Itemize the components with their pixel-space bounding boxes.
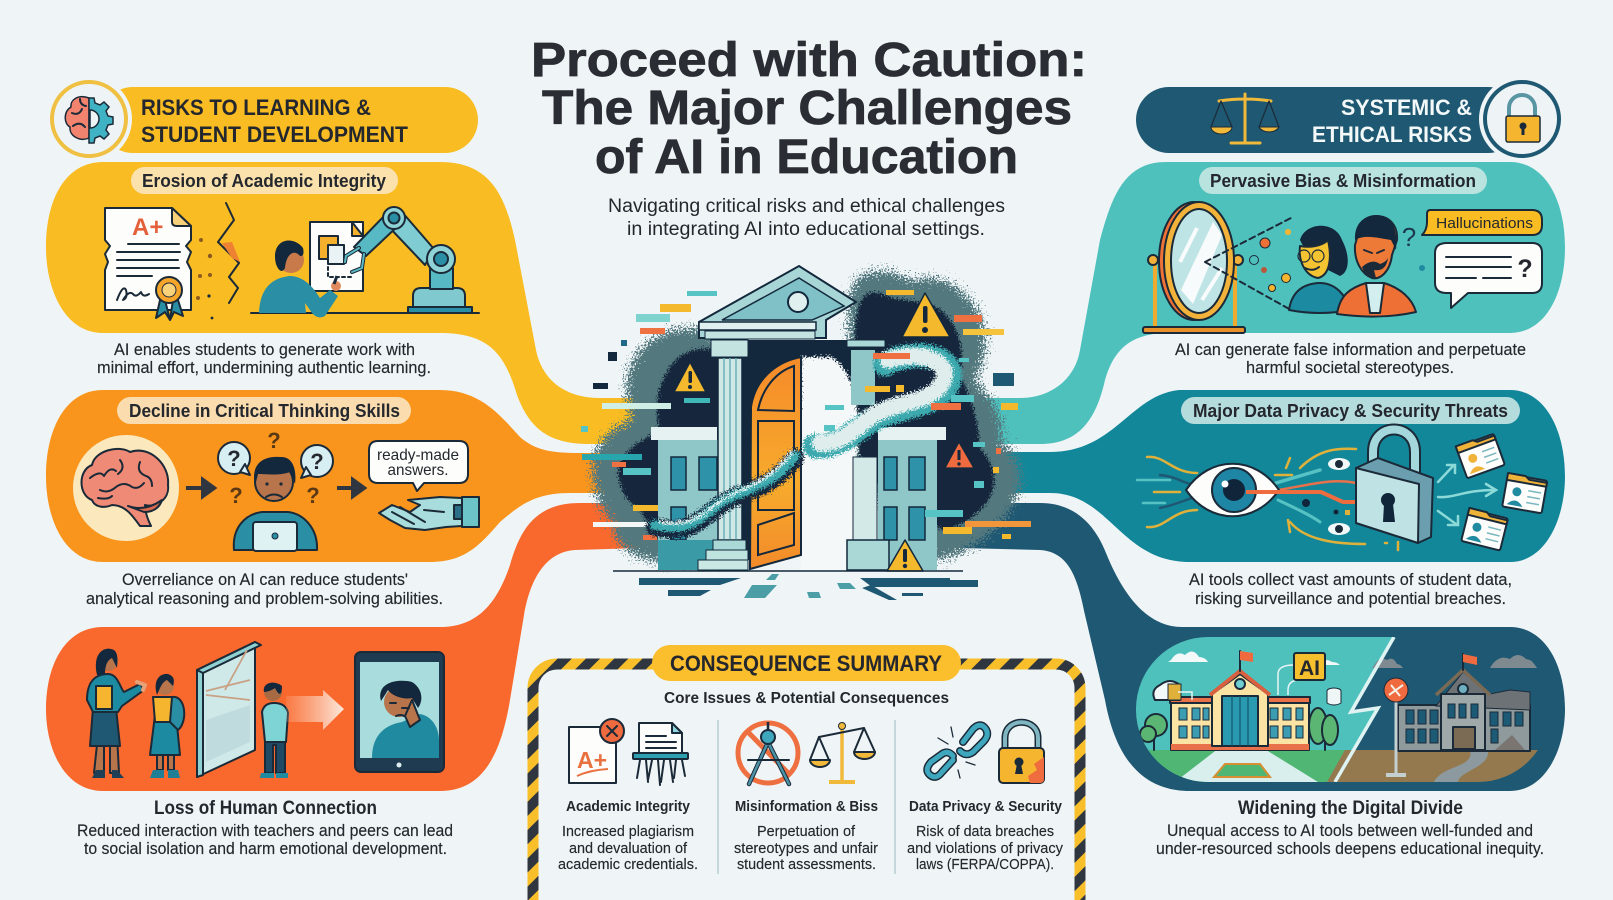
- well-funded side: AI: [1299, 657, 1320, 680]
- arrow: fading: [286, 690, 344, 730]
- panel: decline in critical thinking skills: [46, 390, 640, 608]
- warning triangle: [902, 293, 950, 337]
- open orange door: [750, 357, 801, 569]
- caution tape border: [533, 664, 1080, 900]
- heading and description: Unequal access to AI tools between well-funded and: [1167, 822, 1533, 840]
- warning triangle: [674, 362, 706, 392]
- panel: pervasive bias and misinformation: [960, 162, 1565, 444]
- icon: confused student with laptop: ?: [229, 483, 243, 508]
- icon: confused student with laptop: ?: [310, 449, 324, 474]
- scene: divided schools: [1136, 637, 1550, 782]
- icon: torn diploma: [105, 208, 191, 320]
- summary badge: CONSEQUENCE SUMMARY: [670, 651, 942, 676]
- column: misinformation and bias: stereotypes and unfair: [734, 840, 878, 857]
- icon: brain: [73, 435, 179, 541]
- header: systemic and ethical risks: [1136, 76, 1565, 162]
- speech bubble with question: [1435, 243, 1542, 308]
- description: [1189, 571, 1512, 608]
- heading and description: under-resourced schools deepens educational inequity.: [1156, 840, 1544, 858]
- heading and description: to social isolation and harm emotional development.: [84, 840, 447, 858]
- icon: mirror: [1143, 202, 1245, 333]
- subtitle: Navigating critical risks and ethical challenges: [608, 196, 1005, 217]
- summary badge: [652, 645, 961, 681]
- icon: robot hand: [379, 497, 479, 530]
- icon: lock: [1506, 95, 1540, 142]
- data streams: [1137, 449, 1398, 550]
- title: [531, 34, 1087, 184]
- description: [86, 571, 443, 608]
- column: academic integrity: and devaluation of: [569, 840, 688, 857]
- subtitle: in integrating AI into educational settings.: [627, 219, 985, 240]
- icon: scales: [810, 722, 875, 782]
- icon: student girl: [150, 674, 184, 778]
- speech bubble with question: ?: [1517, 255, 1533, 283]
- callout: hallucinations: [1422, 210, 1542, 235]
- glitch bars right: [824, 290, 1031, 539]
- description: AI can generate false information and perpetuate: [1175, 341, 1526, 359]
- ground and rubble: [613, 571, 978, 600]
- heading and description: Reduced interaction with teachers and peers can lead: [77, 822, 453, 840]
- under-resourced side: [1327, 654, 1550, 782]
- icon: damaged lock: [999, 722, 1044, 783]
- column: misinformation and bias: Perpetuation of: [757, 823, 856, 840]
- icon: broken chain: [927, 725, 987, 778]
- description: minimal effort, undermining authentic learning.: [97, 359, 431, 377]
- speech bubble: ready-made answers: answers.: [388, 462, 448, 479]
- column: data privacy and security: Data Privacy & Security: [909, 799, 1062, 815]
- white gap: [801, 357, 858, 572]
- icon: torn diploma: A+: [132, 214, 163, 241]
- swirling data stream: [655, 356, 950, 529]
- heading and description: [77, 798, 453, 858]
- icon: confused student with laptop: ?: [306, 483, 320, 508]
- heading and description: [1156, 798, 1544, 858]
- header: risks to learning and student development: STUDENT DEVELOPMENT: [141, 122, 409, 147]
- icon: two stereotyped faces: ?: [1402, 222, 1416, 252]
- column: academic integrity: academic credentials.: [558, 856, 698, 873]
- column: misinformation and bias: Misinformation & Biss: [735, 799, 878, 815]
- dark cloud core: [618, 293, 994, 550]
- pill heading: Pervasive Bias & Misinformation: [1210, 171, 1476, 191]
- column: misinformation and bias: [734, 722, 878, 873]
- column: data privacy and security: Risk of data breaches: [916, 823, 1054, 840]
- summary subtitle: Core Issues & Potential Consequences: [664, 690, 949, 707]
- icon: personal data folders: [1438, 433, 1547, 551]
- panel: widening the digital divide: [960, 503, 1565, 858]
- title: Proceed with Caution:: [531, 34, 1087, 87]
- icon: tablet with isolated student: [355, 652, 444, 772]
- grainy cloud halo: [593, 271, 1020, 565]
- lightning divider: [1335, 637, 1394, 782]
- left column and steps: [698, 340, 748, 570]
- subtitle: [608, 196, 1005, 240]
- well-funded side: [1136, 637, 1394, 782]
- column: data privacy and security: and violations of privacy: [907, 840, 1063, 857]
- icon: brain and gear: [65, 97, 113, 143]
- icon: shredder: [633, 723, 688, 785]
- icon: confused student with laptop: ?: [267, 428, 281, 453]
- title: The Major Challenges: [542, 82, 1072, 135]
- title: of AI in Education: [595, 131, 1018, 184]
- icon: failed A+ paper: [569, 719, 624, 783]
- icon: scales: [1211, 94, 1279, 143]
- column: academic integrity: Academic Integrity: [566, 799, 690, 815]
- pill heading: Decline in Critical Thinking Skills: [129, 401, 400, 421]
- panel: major data privacy and security threats: [960, 390, 1565, 608]
- icon: confused student with laptop: [218, 428, 333, 551]
- panel: loss of human connection: [46, 503, 640, 858]
- speech bubble: ready-made answers: ready-made: [377, 447, 459, 464]
- icon: surveillance eye: [1186, 458, 1372, 535]
- pediment roof: [699, 266, 856, 339]
- header: systemic and ethical risks: SYSTEMIC &: [1341, 95, 1472, 120]
- icon: padlock: [1356, 430, 1433, 543]
- header: risks to learning and student development: [46, 76, 478, 162]
- column: data privacy and security: laws (FERPA/COPPA).: [916, 856, 1054, 873]
- column: academic integrity: [558, 719, 698, 873]
- icon: confused student with laptop: ?: [227, 446, 241, 471]
- description: AI tools collect vast amounts of student data,: [1189, 571, 1512, 589]
- crack with debris: [196, 203, 240, 319]
- column: misinformation and bias: student assessments.: [737, 856, 876, 873]
- icon: crossed-out compass: [738, 722, 798, 784]
- header: systemic and ethical risks: ETHICAL RISKS: [1312, 122, 1472, 147]
- warning triangle: [945, 442, 974, 468]
- description: [1175, 341, 1526, 377]
- icon: student using robot arm: [251, 207, 479, 317]
- dashed projection with dots: [1205, 218, 1425, 310]
- pill heading: Erosion of Academic Integrity: [142, 171, 386, 191]
- warning triangle: [887, 540, 923, 571]
- right wing: [847, 340, 946, 570]
- description: risking surveillance and potential breaches.: [1195, 590, 1506, 608]
- icon: two stereotyped faces: [1289, 215, 1416, 317]
- icon: lone boy: [260, 683, 288, 778]
- description: [97, 341, 431, 377]
- heading and description: Widening the Digital Divide: [1238, 798, 1463, 819]
- icon: teacher: [87, 649, 145, 778]
- glitch bars left: [581, 291, 717, 540]
- header: risks to learning and student development: RISKS TO LEARNING &: [141, 95, 371, 120]
- panel: consequence summary: [533, 645, 1080, 900]
- description: analytical reasoning and problem-solving abilities.: [86, 590, 443, 608]
- speech bubble: ready-made answers: [369, 441, 468, 491]
- callout: hallucinations: Hallucinations: [1436, 215, 1533, 232]
- dark wall behind columns: [720, 340, 875, 410]
- description: harmful societal stereotypes.: [1246, 359, 1454, 377]
- heading and description: Loss of Human Connection: [154, 798, 377, 819]
- panel: erosion of academic integrity: [46, 162, 640, 444]
- arrow: [337, 480, 364, 496]
- column: academic integrity: Increased plagiarism: [562, 823, 694, 840]
- pill heading: Major Data Privacy & Security Threats: [1193, 401, 1508, 421]
- description: Overreliance on AI can reduce students': [122, 571, 408, 589]
- icon: failed A+ paper: A+: [577, 747, 607, 773]
- arrow: [186, 480, 214, 496]
- central illustration: crumbling school: [581, 266, 1031, 600]
- icon: glass barrier: [197, 642, 261, 777]
- description: AI enables students to generate work with: [114, 341, 415, 359]
- left wing: [651, 427, 718, 570]
- column: data privacy and security: [907, 722, 1063, 873]
